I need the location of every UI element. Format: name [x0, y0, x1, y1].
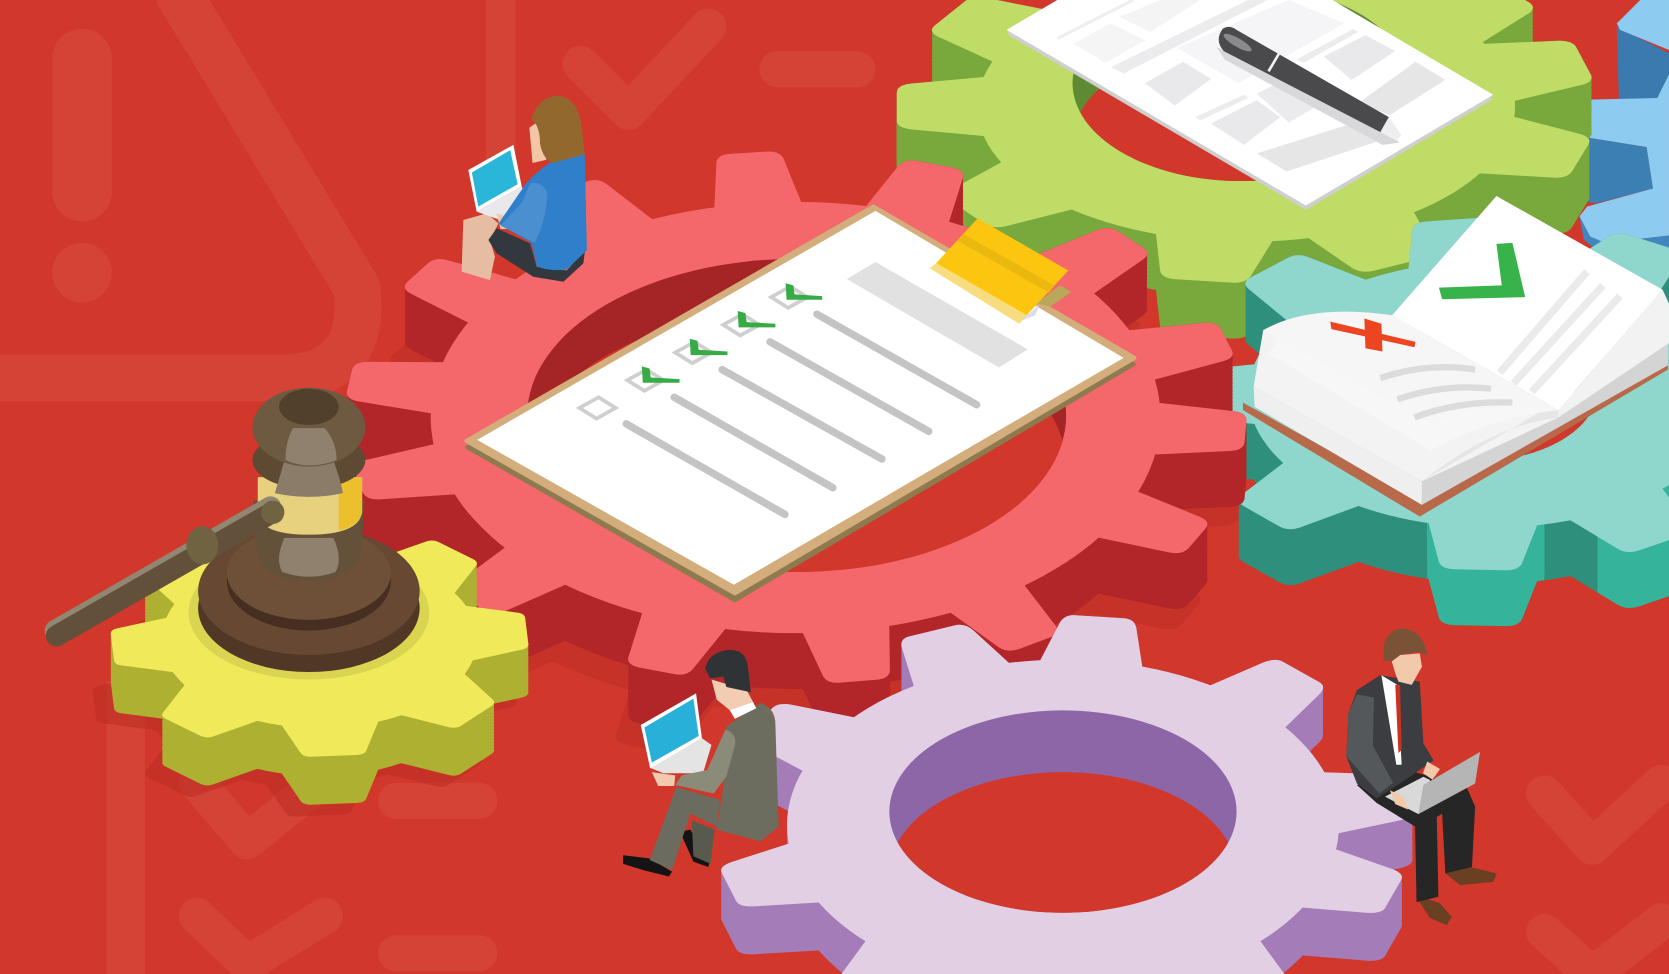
checkboxes	[579, 287, 807, 419]
icon: green check	[1439, 243, 1525, 299]
left page text lines	[1380, 367, 1512, 418]
person: man with laptop, left	[623, 650, 779, 877]
gavel	[55, 388, 429, 680]
check marks	[642, 283, 822, 383]
checklist lines	[626, 314, 977, 514]
gear: blue	[1560, 0, 1669, 279]
clip: yellow tab	[930, 218, 1071, 324]
gear: yellow	[91, 520, 530, 818]
gavel head	[252, 388, 365, 580]
icon: red cross	[1330, 318, 1415, 351]
gavel handle	[55, 501, 284, 636]
clipboard	[467, 207, 1134, 601]
icon: pen	[1216, 27, 1402, 145]
document and pen on green gear	[1007, 0, 1493, 210]
gear: red	[328, 150, 1248, 763]
right page	[1392, 196, 1663, 410]
person: man with laptop, right	[1346, 628, 1497, 925]
gear: purple	[714, 613, 1416, 974]
person: woman with laptop	[462, 96, 587, 282]
gear: teal	[1232, 218, 1669, 626]
open book on teal gear	[1243, 196, 1669, 517]
right page text lines	[1500, 272, 1620, 392]
left page	[1263, 312, 1558, 425]
gear: green	[897, 0, 1599, 340]
gavel sound block	[189, 526, 429, 680]
